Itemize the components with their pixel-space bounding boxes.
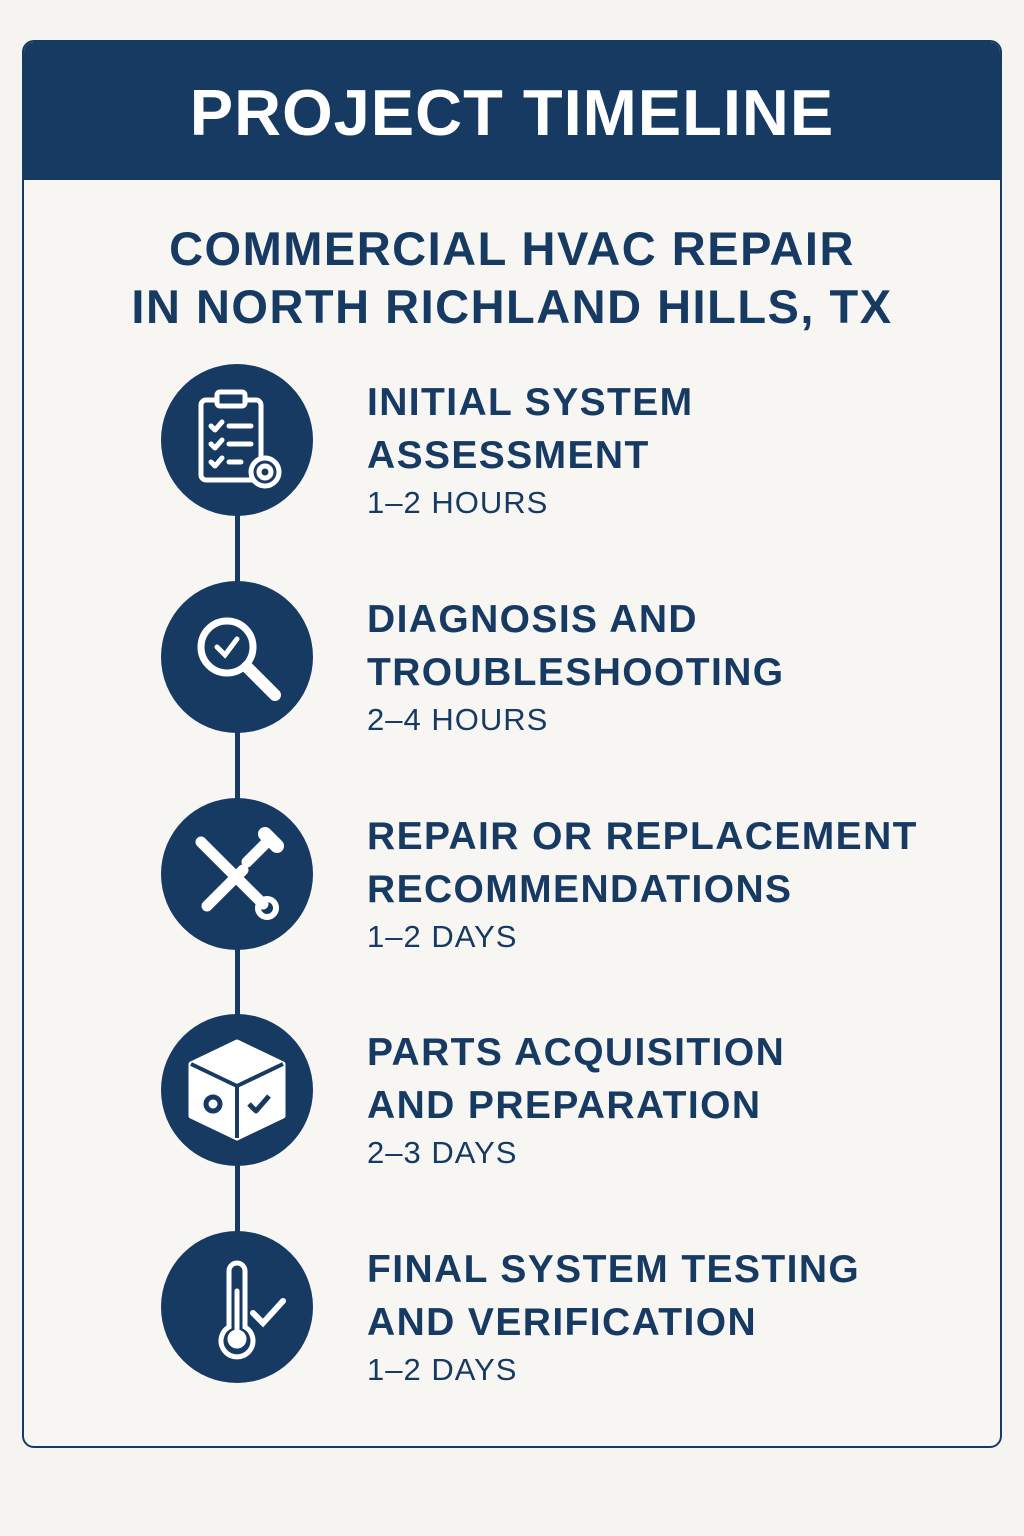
- step 3: [161, 798, 918, 954]
- step 1 text: INITIAL SYSTEM: [367, 381, 694, 424]
- subtitle: [131, 222, 893, 333]
- step 4: [161, 1014, 785, 1170]
- title header: PROJECT TIMELINE: [190, 76, 834, 149]
- step 5: [161, 1231, 860, 1387]
- step 2 text: DIAGNOSIS AND: [367, 598, 698, 641]
- step 4 text: AND PREPARATION: [367, 1084, 761, 1127]
- step 1 duration: 1–2 HOURS: [367, 485, 548, 520]
- subtitle: COMMERCIAL HVAC REPAIR: [169, 222, 855, 275]
- step 1 text: ASSESSMENT: [367, 434, 650, 477]
- step 2 text: TROUBLESHOOTING: [367, 651, 784, 694]
- icon: box: [161, 1014, 313, 1166]
- step 2: [161, 581, 784, 737]
- step 1: [161, 364, 694, 520]
- icon: clipboard: [161, 364, 313, 516]
- step 3 text: [367, 815, 918, 911]
- step 3 text: REPAIR OR REPLACEMENT: [367, 815, 918, 858]
- subtitle: IN NORTH RICHLAND HILLS, TX: [131, 280, 893, 333]
- step 1 text: [367, 381, 694, 477]
- step 4 text: [367, 1031, 785, 1127]
- step 5 text: [367, 1248, 860, 1344]
- step 3 text: RECOMMENDATIONS: [367, 868, 792, 911]
- icon: thermometer: [161, 1231, 313, 1383]
- icon: tools: [161, 798, 313, 950]
- title header: [24, 42, 1000, 180]
- step 3 duration: 1–2 DAYS: [367, 919, 517, 954]
- step 2 text: [367, 598, 784, 694]
- icon: magnifier: [161, 581, 313, 733]
- step 4 text: PARTS ACQUISITION: [367, 1031, 785, 1074]
- step 5 text: AND VERIFICATION: [367, 1301, 757, 1344]
- timeline connector: [235, 482, 240, 1352]
- step 4 duration: 2–3 DAYS: [367, 1135, 517, 1170]
- step 2 duration: 2–4 HOURS: [367, 702, 548, 737]
- step 5 duration: 1–2 DAYS: [367, 1352, 517, 1387]
- step 5 text: FINAL SYSTEM TESTING: [367, 1248, 860, 1291]
